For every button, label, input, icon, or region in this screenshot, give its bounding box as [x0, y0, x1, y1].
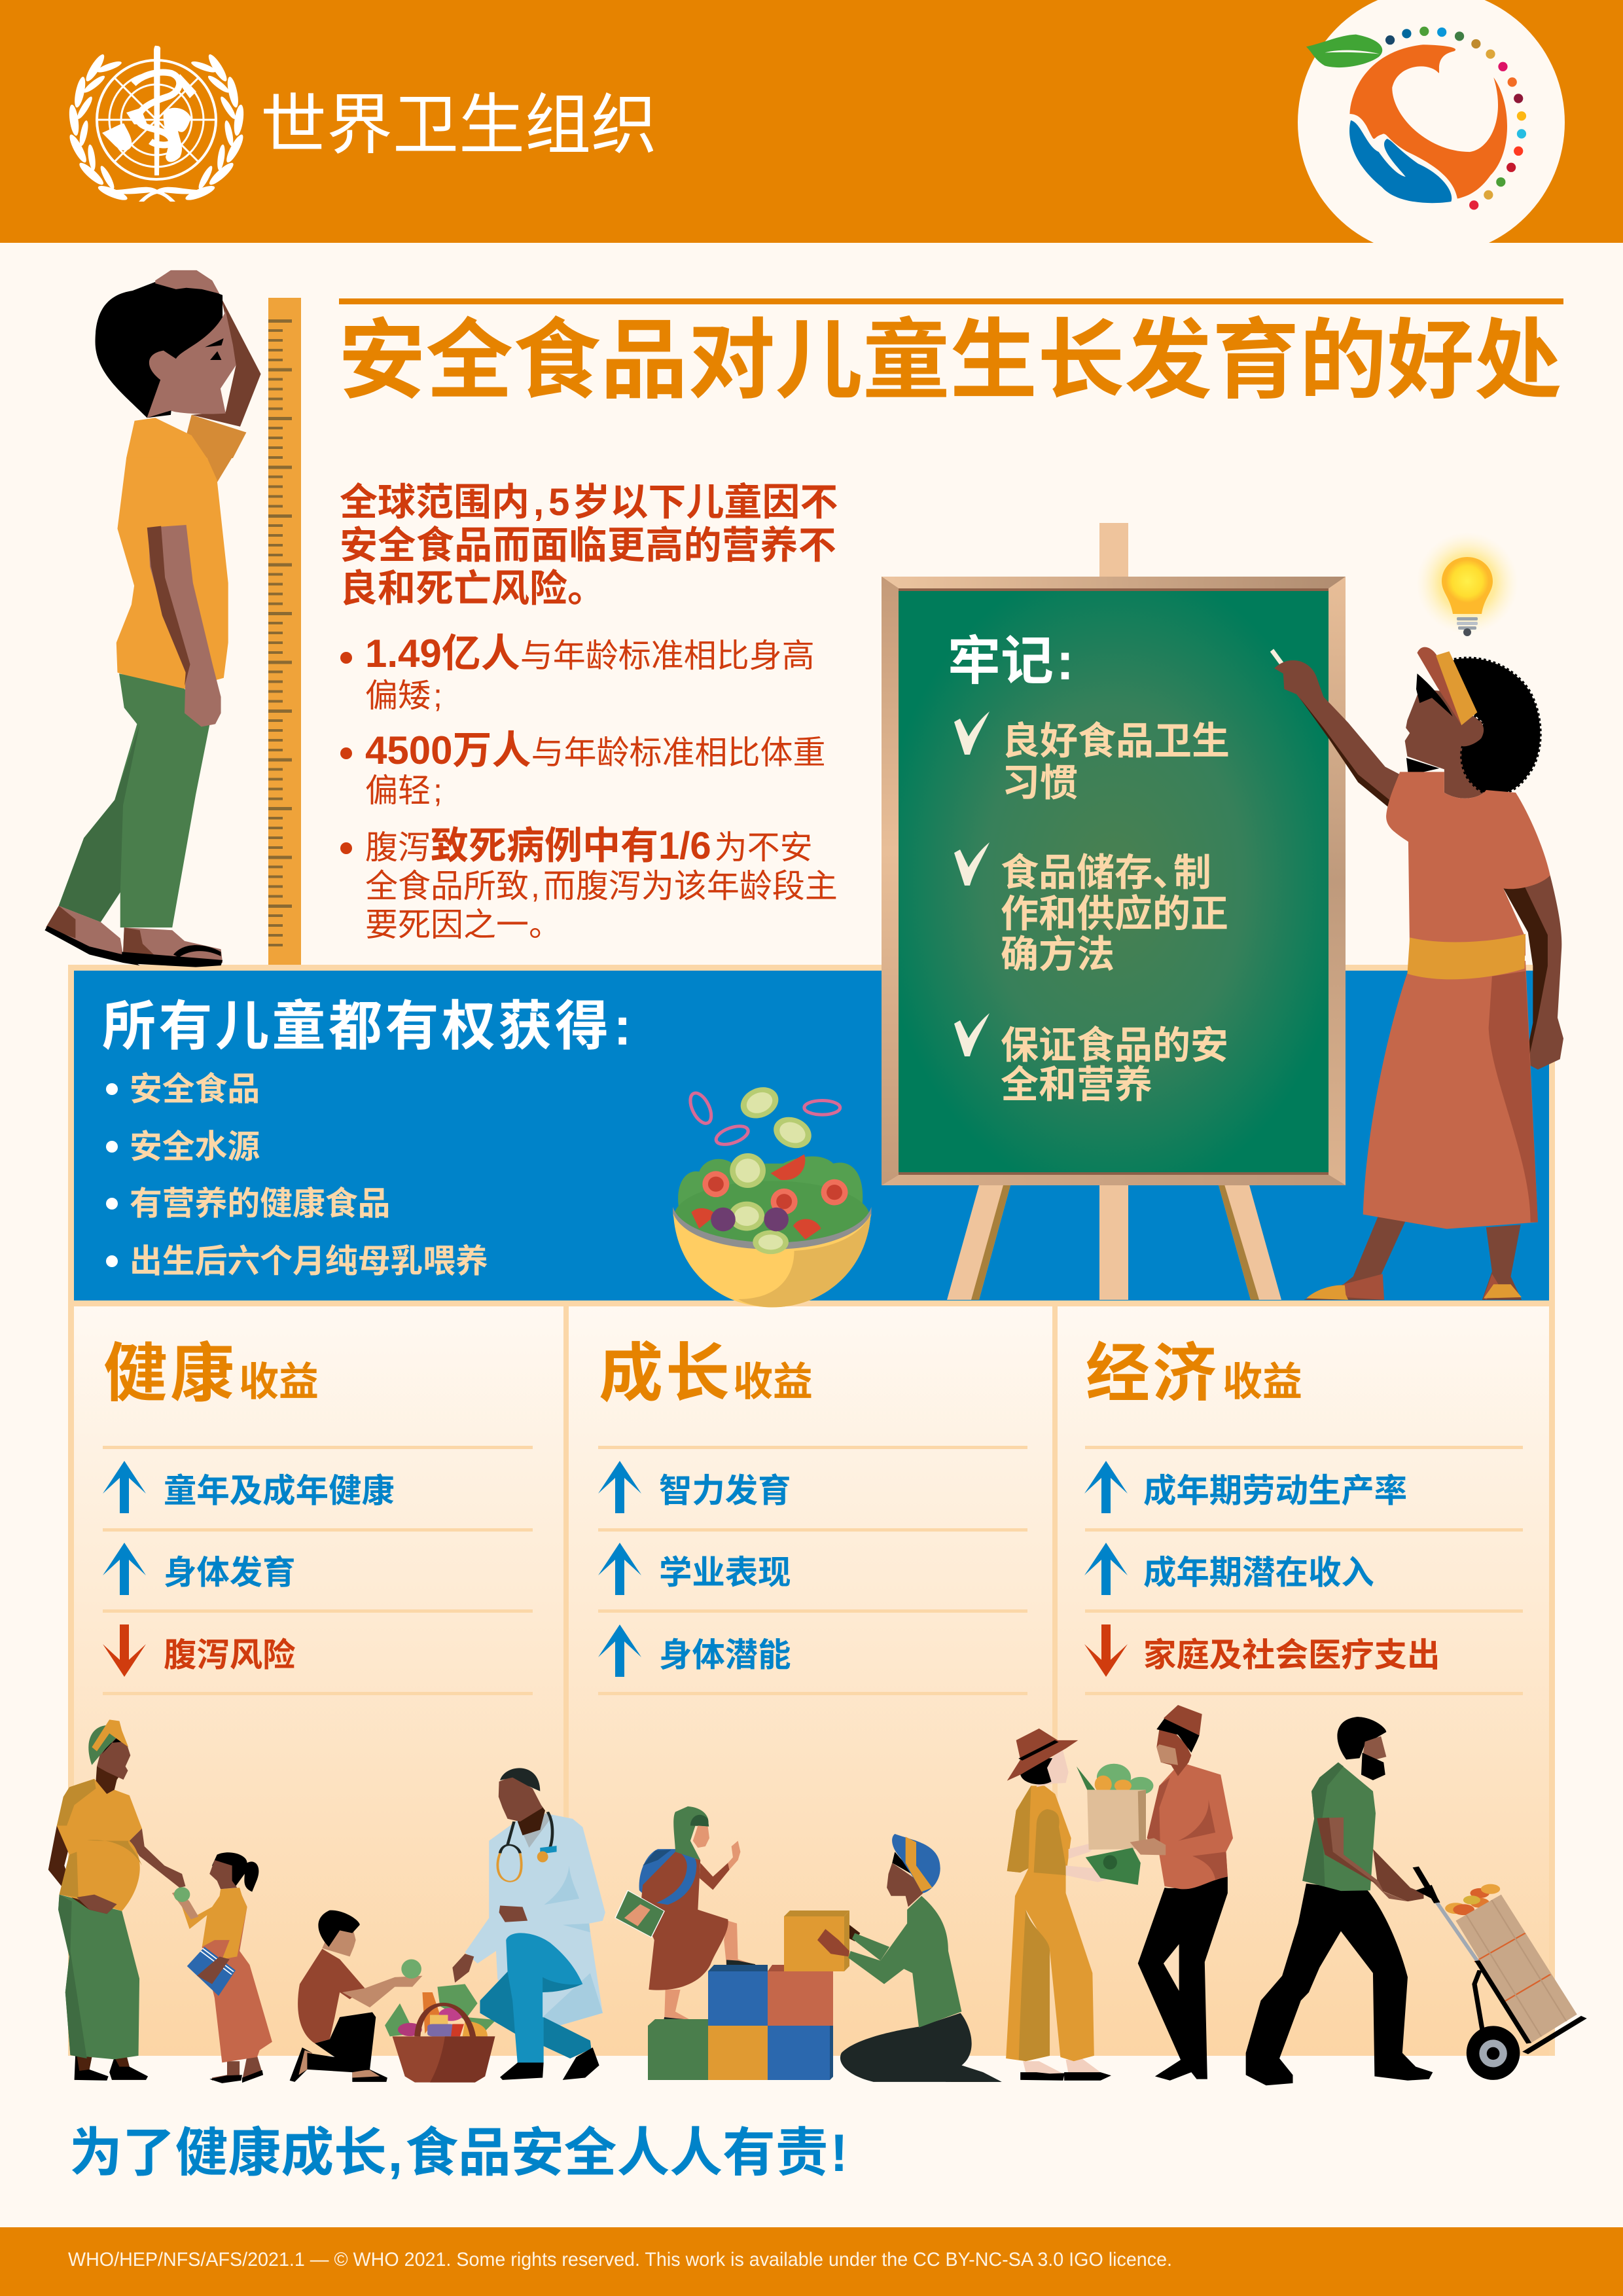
panel: children's rights (blue)	[68, 965, 1555, 1306]
heading: economic	[1086, 1337, 1302, 1409]
illustration: people from health group	[48, 1719, 755, 2083]
text block: global risk intro: 全球范围内,5岁以下儿童因不	[340, 481, 838, 524]
benefit: academic performance up: 学业表现	[659, 1554, 791, 1591]
column: growth benefits	[598, 1337, 1027, 1695]
icon: light bulb	[1416, 532, 1518, 636]
benefit: adult labour productivity up	[1084, 1461, 1407, 1513]
benefit: adult labour productivity up: 成年期劳动生产率	[1143, 1472, 1407, 1509]
checklist item: hygiene	[954, 711, 1230, 804]
figure: bearded man pushing trolley	[1246, 1717, 1433, 2085]
benefit: physical potential up	[598, 1624, 791, 1677]
illustration: teacher woman at board	[1272, 647, 1563, 1300]
benefit: intellectual development up	[598, 1461, 791, 1513]
benefit: household and societal health costs down	[1084, 1624, 1440, 1677]
list: entitlements: 有营养的健康食品	[130, 1185, 390, 1222]
checklist item: safe and nutritious: 保证食品的安	[1001, 1024, 1228, 1067]
stat: stunted	[340, 632, 815, 714]
stat: diarrhoea deaths: 全食品所致,而腹泻为该年龄段主	[365, 868, 838, 905]
text block: global risk intro	[340, 481, 838, 610]
stat: diarrhoea deaths: 腹泻致死病例中有1/6为不安	[365, 825, 813, 867]
benefit: household and societal health costs down: 家庭及社会医疗支出	[1143, 1636, 1440, 1674]
heading: remember: 牢记:	[948, 632, 1074, 691]
checklist item: safe and nutritious: 全和营养	[1001, 1064, 1152, 1106]
illustration: toy blocks	[648, 1910, 849, 2080]
benefit: physical development up	[103, 1543, 296, 1595]
stat: diarrhoea deaths	[340, 825, 838, 943]
checklist item: storage and preparation	[954, 842, 1228, 976]
figure: man in orange shirt	[1130, 1705, 1233, 2081]
heading: growth: 成长	[599, 1337, 732, 1409]
benefit: intellectual development up: 智力发育	[659, 1472, 791, 1509]
benefit: academic performance up	[598, 1543, 791, 1595]
benefit: diarrhoea risk down	[103, 1624, 296, 1677]
checklist item: storage and preparation: 确方法	[1001, 933, 1115, 976]
header: organisation name: 世界卫生组织	[260, 89, 657, 162]
stat: diarrhoea deaths: 要死因之一。	[365, 906, 562, 943]
figure: girl with book and apple	[172, 1852, 272, 2083]
list: entitlements	[106, 1071, 488, 1280]
checklist item: storage and preparation: 食品储存、制	[1001, 852, 1211, 894]
checklist item: hygiene: 良好食品卫生	[1002, 720, 1230, 762]
heading: economic: 收益	[1222, 1359, 1302, 1404]
text block: global risk intro: 良和死亡风险。	[340, 567, 605, 610]
icon: shopping bag of vegetables and banknotes	[1077, 1764, 1153, 1885]
slogan: 为了健康成长,食品安全人人有责!	[69, 2124, 848, 2183]
heading: health: 健康	[103, 1337, 237, 1409]
heading: health: 收益	[239, 1359, 319, 1404]
figure: pregnant woman	[48, 1719, 185, 2081]
benefit: diarrhoea risk down: 腹泻风险	[164, 1636, 296, 1674]
footer: licence text: WHO/HEP/NFS/AFS/2021.1 — © WHO 2021. Some rights reserved. This work is available under the CC BY-NC-SA 3.0 IGO licence.	[68, 2249, 1172, 2270]
stat: stunted: 1.49亿人与年龄标准相比身高	[365, 632, 815, 675]
benefit: childhood and adult health up: 童年及成年健康	[164, 1472, 395, 1509]
header band	[0, 0, 1623, 243]
list: statistics	[340, 632, 838, 943]
benefit: physical potential up: 身体潜能	[659, 1636, 791, 1674]
ruler: height chart	[268, 298, 301, 965]
text block: global risk intro: 安全食品而面临更高的营养不	[340, 524, 836, 567]
title: 安全食品对儿童生长发育的好处	[338, 312, 1561, 410]
figure: kneeling woman at blocks	[817, 1834, 1002, 2082]
illustration: blackboard easel	[882, 523, 1346, 1300]
footer band	[0, 2227, 1623, 2296]
figure: doctor with stethoscope	[452, 1768, 605, 2080]
panel: benefit columns background	[68, 965, 1555, 2056]
checklist item: storage and preparation: 作和供应的正	[1001, 893, 1228, 935]
figure: woman in yellow with shopping	[1006, 1729, 1111, 2081]
heading: growth: 收益	[733, 1359, 813, 1404]
stat: underweight: 4500万人与年龄标准相比体重	[365, 728, 825, 772]
checklist item: hygiene: 习惯	[1002, 762, 1078, 804]
heading: health	[103, 1337, 319, 1409]
logo: food safety heart and hand emblem	[1298, 0, 1565, 256]
heading: all children are entitled to: 所有儿童都有权获得:	[102, 997, 634, 1056]
benefit: adult income potential up	[1084, 1543, 1374, 1595]
title rule	[339, 298, 1563, 304]
illustration: boy measuring height	[45, 270, 261, 967]
stat: underweight	[340, 728, 825, 809]
checklist item: safe and nutritious	[954, 1013, 1228, 1106]
stat: stunted: 偏矮;	[365, 677, 442, 714]
column: economic benefits	[1084, 1337, 1523, 1695]
figure: kneeling boy with apple	[290, 1910, 422, 2082]
benefit: physical development up: 身体发育	[164, 1554, 296, 1591]
heading: economic: 经济	[1086, 1337, 1219, 1409]
list: entitlements: 出生后六个月纯母乳喂养	[130, 1243, 488, 1280]
benefit: adult income potential up: 成年期潜在收入	[1143, 1554, 1374, 1591]
stat: underweight: 偏轻;	[365, 772, 442, 809]
logo: WHO emblem	[66, 46, 247, 207]
figure: girl with backpack	[615, 1806, 755, 2026]
icon: vegetable basket	[385, 1984, 496, 2083]
illustration: salad bowl	[673, 1081, 871, 1307]
blackboard frame	[882, 577, 1346, 1185]
list: entitlements: 安全食品	[130, 1071, 260, 1107]
illustration: people from economic group	[817, 1705, 1584, 2085]
heading: growth	[599, 1337, 813, 1409]
column: health benefits	[103, 1337, 533, 1695]
list: entitlements: 安全水源	[130, 1128, 260, 1165]
illustration: trolley with fruit crates	[1416, 1867, 1584, 2080]
benefit: childhood and adult health up	[103, 1461, 395, 1513]
